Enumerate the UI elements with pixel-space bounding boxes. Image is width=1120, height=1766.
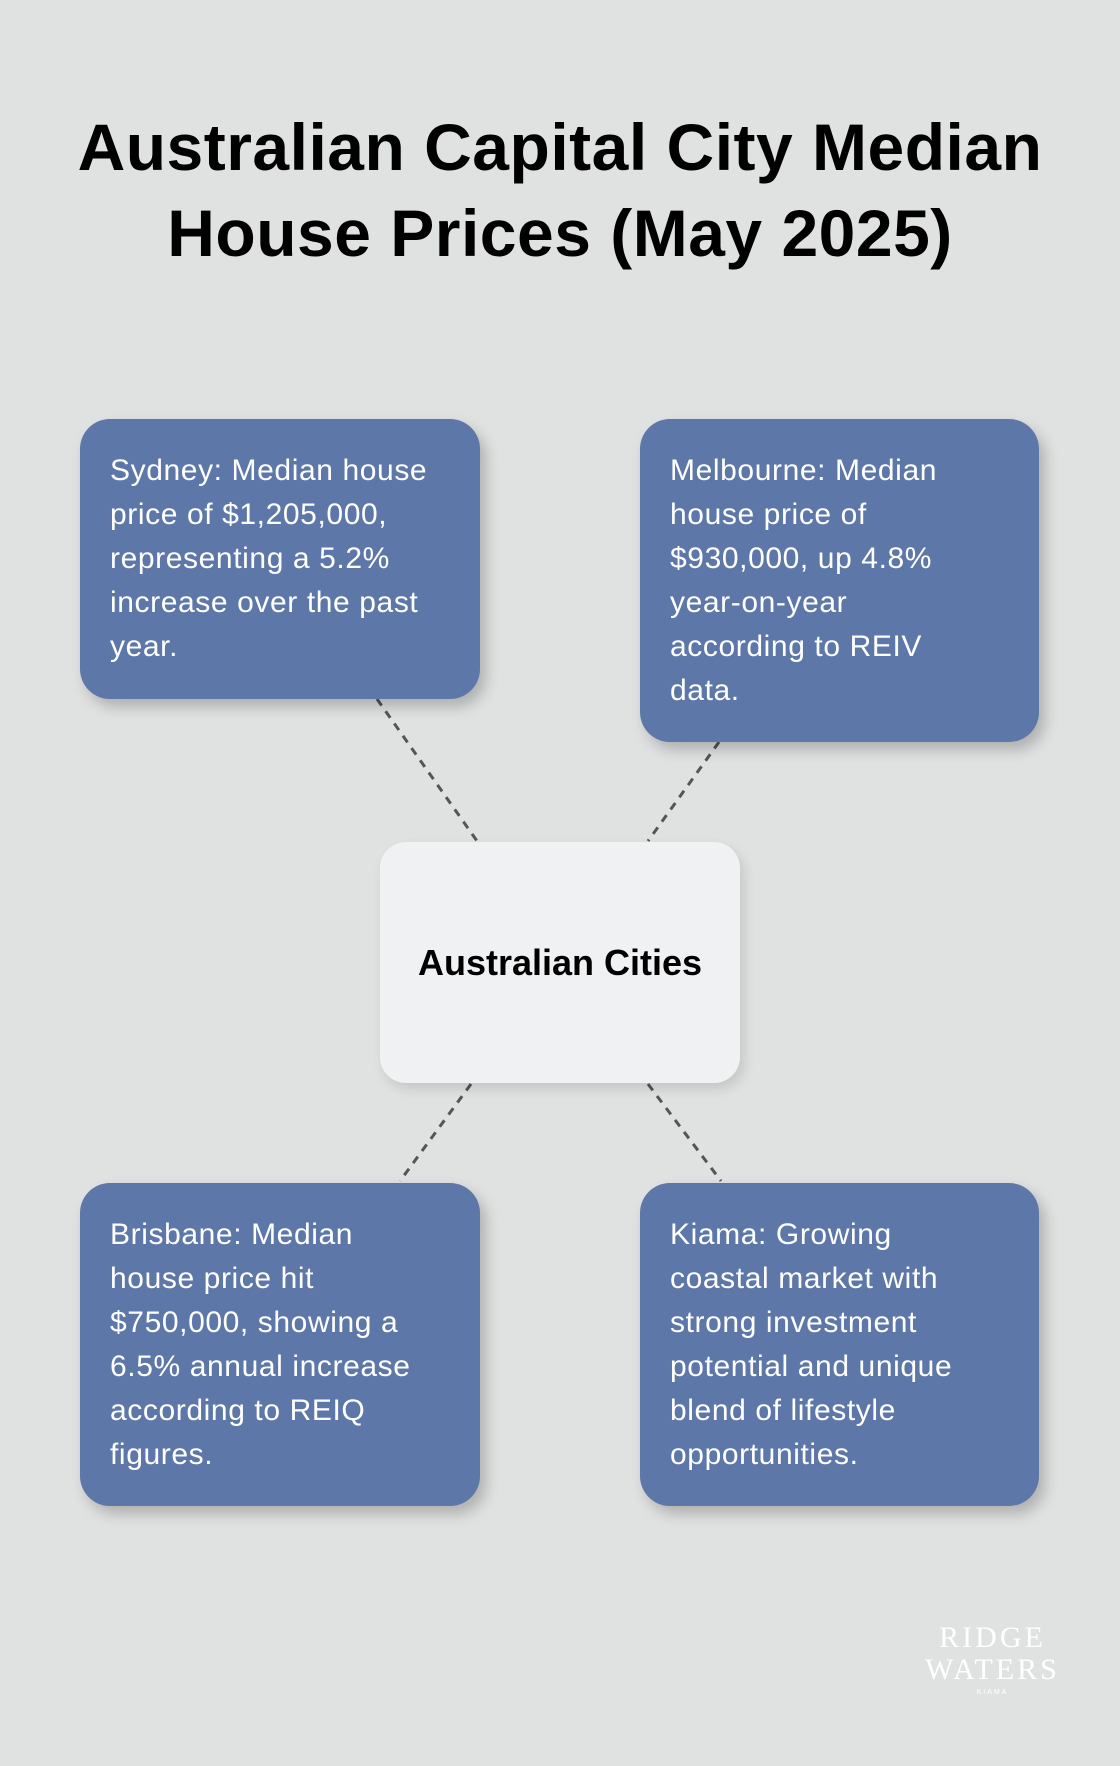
panel: Melbourne <box>640 419 1039 742</box>
panel: Kiama <box>640 1183 1039 1506</box>
logo: WATERS <box>925 1653 1060 1686</box>
center node <box>380 842 740 1083</box>
title: Australian Capital City Median <box>78 110 1042 184</box>
panel: Sydney <box>80 419 480 699</box>
panel: Melbourne: house price of <box>670 498 867 531</box>
logo: KIAMA <box>977 1689 1008 1696</box>
panel: Kiama: coastal market with <box>670 1262 938 1295</box>
title <box>78 110 1042 270</box>
panel: Brisbane: $750,000, showing a <box>110 1306 398 1339</box>
title: House Prices (May 2025) <box>167 196 953 270</box>
panel: Kiama: blend of lifestyle <box>670 1394 896 1427</box>
panel: Melbourne: $930,000, up 4.8% <box>670 542 932 575</box>
panel: Brisbane: figures. <box>110 1438 213 1471</box>
logo: RIDGE <box>939 1621 1046 1654</box>
panel: Sydney: increase over the past <box>110 586 418 619</box>
panel: Sydney: representing a 5.2% <box>110 542 390 575</box>
panel: Kiama: Kiama: Growing <box>670 1218 892 1251</box>
panel: Kiama: strong investment <box>670 1306 917 1339</box>
panel: Melbourne: data. <box>670 674 740 707</box>
center node: Australian Cities <box>418 942 702 982</box>
panel: Sydney: year. <box>110 630 178 663</box>
panel: Kiama: potential and unique <box>670 1350 952 1383</box>
panel: Brisbane <box>80 1183 480 1506</box>
panel: Brisbane: Brisbane: Median <box>110 1218 353 1251</box>
panel: Kiama: opportunities. <box>670 1438 859 1471</box>
panel: Melbourne: Melbourne: Median <box>670 454 937 487</box>
panel: Melbourne: according to REIV <box>670 630 922 663</box>
panel: Brisbane: 6.5% annual increase <box>110 1350 411 1383</box>
panel: Sydney: price of $1,205,000, <box>110 498 387 531</box>
logo <box>925 1621 1060 1696</box>
panel: Melbourne: year-on-year <box>670 586 847 619</box>
panel: Brisbane: according to REIQ <box>110 1394 365 1427</box>
panel: Brisbane: house price hit <box>110 1262 314 1295</box>
panel: Sydney: Sydney: Median house <box>110 454 427 487</box>
